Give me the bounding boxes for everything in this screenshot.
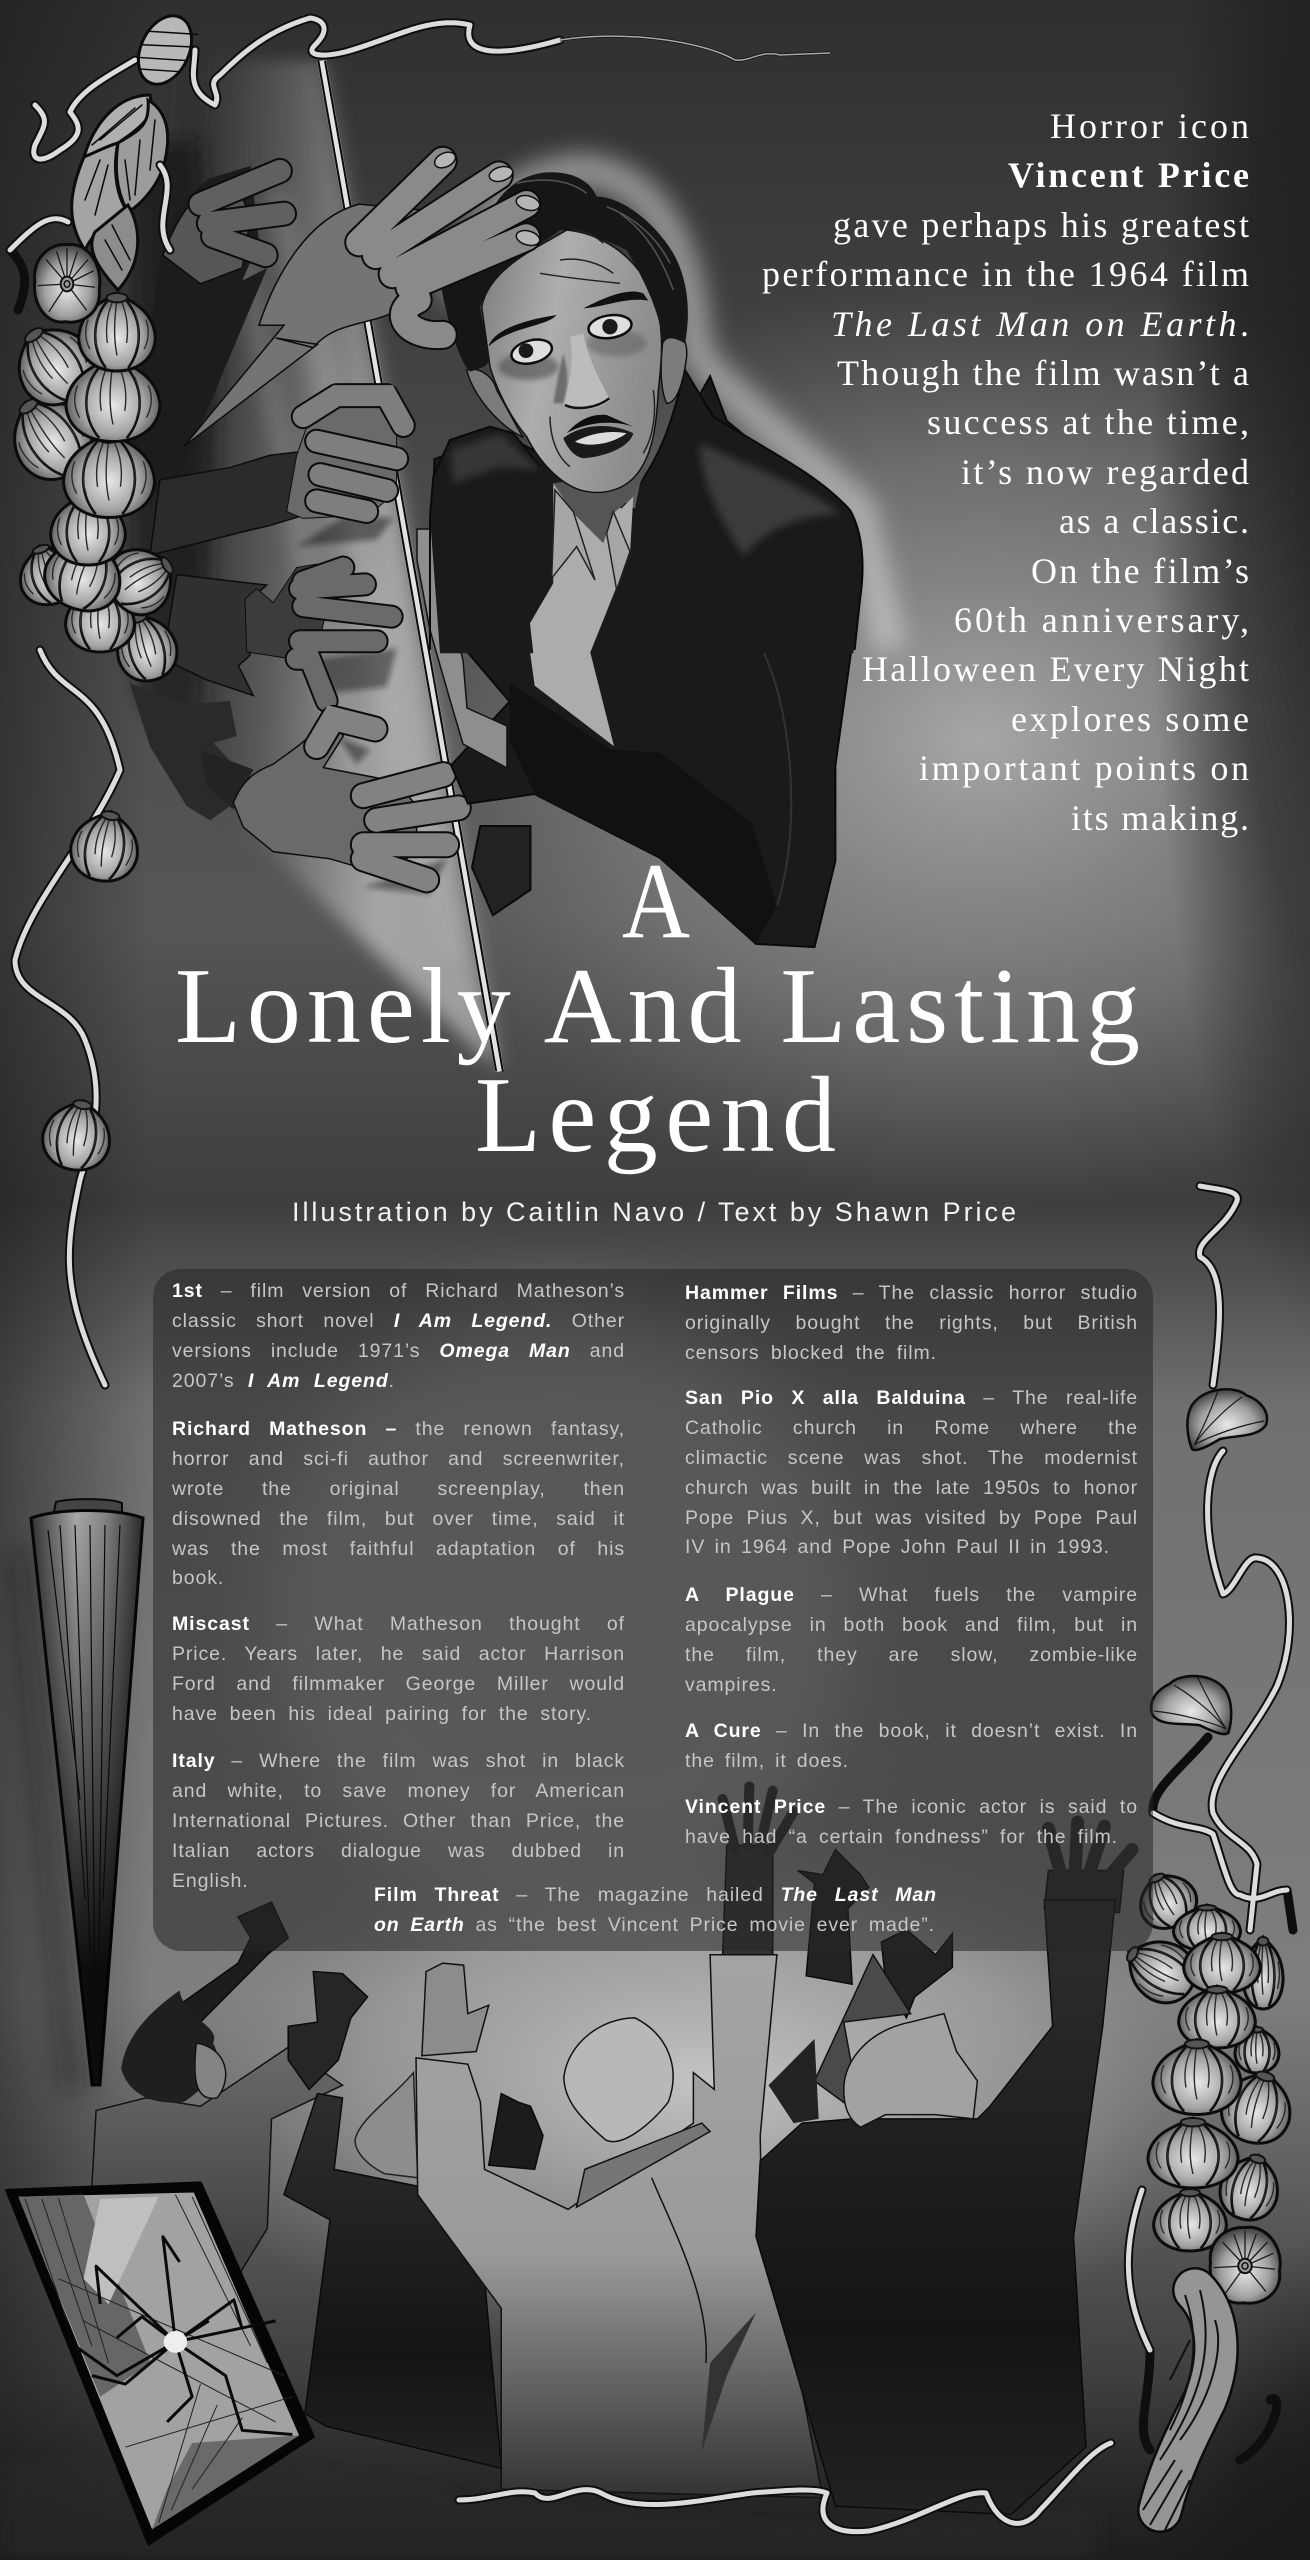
intro paragraph: explores some [1011,699,1249,739]
note: A Plague: A Plague – What fuels the vampire [685,1584,1138,1606]
note: Italy: and white, to save money for American [172,1780,625,1802]
note: A Cure: A Cure – In the book, it doesn’t exist. In [685,1720,1138,1742]
title: Lonely And Lasting [175,947,1140,1066]
braid strands [84,95,151,157]
note: Italy: Italian actors dialogue was dubbed in [172,1840,625,1862]
left vampire [92,1902,368,2283]
intro paragraph: its making. [1071,798,1249,838]
intro paragraph: Horror icon [1050,106,1249,146]
intro paragraph: performance in the 1964 film [762,254,1249,294]
intro paragraph: gave perhaps his greatest [833,205,1249,245]
note: Italy: Italy – Where the film was shot in black [172,1750,625,1772]
hand: middle [287,389,403,518]
sleeve: lower arm [163,575,267,696]
note: Vincent Price [685,1796,1138,1848]
note: San Pio X alla Balduina: IV in 1964 and Pope John Paul II in 1993. [685,1536,1110,1558]
door panel [125,61,503,1072]
left garlic bulbs [0,244,187,688]
note: Miscast: have been his ideal pairing for the story. [172,1703,592,1725]
note: Hammer Films: originally bought the rights, but British [685,1312,1138,1334]
note: Film Threat: Film Threat – The magazine hailed The Last Man [374,1884,937,1906]
hand shadows [297,515,447,894]
note: Miscast [172,1613,625,1725]
note: A Cure: the film, it does. [685,1750,849,1772]
byline: Illustration by Caitlin Navo / Text by Shawn Price [292,1197,1016,1227]
note: 1st: 2007’s I Am Legend. [172,1370,395,1392]
note: Italy [172,1750,625,1892]
right vine with bulbs [1149,1186,1293,1930]
note: Miscast: Miscast – What Matheson thought of [172,1613,625,1635]
note: Italy: English. [172,1870,249,1892]
dark vampire [284,2073,501,2468]
right dark vampire [756,1900,1115,2515]
intro paragraph [762,106,1249,838]
note: San Pio X alla Balduina [685,1387,1138,1558]
note: San Pio X alla Balduina: climactic scene was shot. The modernist [685,1447,1138,1469]
note: Film Threat [374,1884,937,1936]
mirror cracks [75,2237,292,2435]
hand resting on the door edge [417,529,507,768]
hands: middle and lower, clawing at the door [130,389,458,894]
raised hands behind the panel [723,1786,1132,2018]
face features [488,230,655,467]
note: Miscast: Ford and filmmaker George Miller would [172,1673,625,1695]
note: Richard Matheson: Richard Matheson – the renown fantasy, [172,1418,625,1440]
broken mirror [7,2183,313,2544]
hand: large top, gripping the hair [184,149,541,446]
note: Richard Matheson [172,1418,625,1589]
jacket shoulders [430,370,863,653]
note: Vincent Price: have had “a certain fondness” for the film. [685,1826,1118,1848]
note: A Plague: the film, they are slow, zombie-like [685,1644,1138,1666]
title: Legend [475,1056,836,1175]
note: San Pio X alla Balduina: Pope Pius X, but was visited by Pope Paul [685,1507,1138,1529]
floor shadow [0,2456,1094,2557]
note: Richard Matheson: book. [172,1567,224,1589]
note: A Plague: vampires. [685,1674,778,1696]
intro paragraph: The Last Man on Earth. [831,304,1249,344]
Vincent Price upper body and head [430,172,863,653]
title: A [622,842,690,961]
intro paragraph: as a classic. [1059,501,1249,541]
sleeve and ragged hand behind [130,683,237,820]
hand: large bottom [200,711,458,880]
note: Richard Matheson: wrote the original screenplay, then [172,1478,625,1500]
note: San Pio X alla Balduina: Catholic church in Rome where the [685,1417,1138,1439]
note: Richard Matheson: was the most faithful adaptation of his [172,1538,625,1560]
braid and striped tuft [1160,2290,1216,2510]
note: A Plague [685,1584,1138,1696]
left vine with loose bulbs [15,650,144,1385]
intro paragraph: success at the time, [927,402,1249,442]
note: San Pio X alla Balduina: San Pio X alla Balduina – The real-life [685,1387,1138,1409]
intro paragraph: Though the film wasn’t a [837,353,1249,393]
stake [10,1499,143,2090]
note: Film Threat: on Earth as “the best Vincent Price movie ever made”. [374,1914,935,1936]
note: Richard Matheson: horror and sci-fi author and screenwriter, [172,1448,625,1470]
note: A Plague: apocalypse in both book and film, but in [685,1614,1138,1636]
Vincent Price silhouette glow [455,170,890,650]
note: Hammer Films: censors blocked the film. [685,1342,937,1364]
braid tuft [128,7,203,93]
note: Miscast: Price. Years later, he said actor Harrison [172,1643,625,1665]
note: Richard Matheson: disowned the film, but over time, said it [172,1508,625,1530]
top smoke vine [193,18,830,105]
note: 1st: 1st – film version of Richard Matheson’s [172,1280,625,1302]
intro paragraph: 60th anniversary, [954,600,1249,640]
ears [467,333,687,437]
note: 1st: classic short novel I Am Legend. Other [172,1310,625,1332]
note: Vincent Price: Vincent Price – The iconic actor is said to [685,1796,1138,1818]
intro paragraph: On the film’s [1031,551,1249,591]
intro paragraph: Halloween Every Night [862,649,1249,689]
hair [438,172,688,372]
notes panel background [153,1269,1153,1951]
intro paragraph: Vincent Price [1008,155,1249,195]
bottom smoke vine [459,2443,1111,2532]
note: Hammer Films: Hammer Films – The classic horror studio [685,1282,1138,1304]
note: 1st: versions include 1971’s Omega Man and [172,1340,625,1362]
note: Hammer Films [685,1282,1138,1364]
hand: lower middle [245,564,392,701]
right garlic braid and bulbs [1114,1863,1300,2530]
crowd of vampires [0,1786,1132,2557]
neck and shirt [533,483,633,653]
left garlic braid [10,7,203,310]
note: 1st [172,1280,625,1392]
note: A Cure [685,1720,1138,1772]
intro paragraph: important points on [919,748,1249,788]
face [482,230,662,492]
sleeve: middle arm [150,452,317,555]
central vampire in light coat [416,1955,823,2498]
note: San Pio X alla Balduina: church was built in the late 1950s to honor [685,1477,1138,1499]
Vincent Price lower body [433,376,862,947]
intro paragraph: it’s now regarded [961,452,1249,492]
hand: back top [109,166,284,510]
note: Italy: International Pictures. Other than Price, the [172,1810,625,1832]
title [175,842,1140,1175]
illustration: door with reaching hands and Vincent Price [109,61,890,1072]
